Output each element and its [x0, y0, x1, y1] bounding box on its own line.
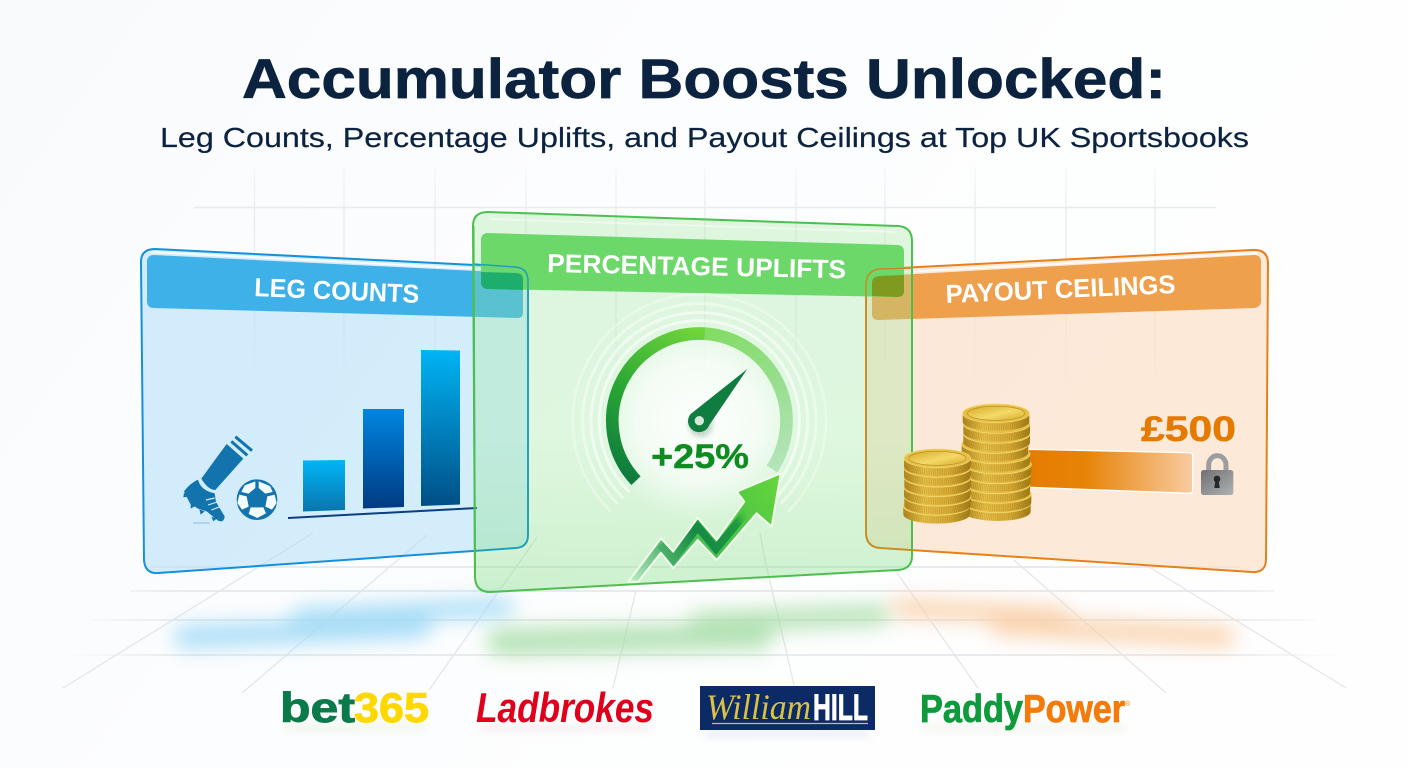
floor shadow: green panel: [500, 615, 880, 642]
panel: payout ceilings: [866, 250, 1268, 572]
logo shadows: [285, 725, 1125, 737]
title: Accumulator Boosts Unlocked:: [242, 47, 1166, 110]
logo: Ladbrokes: Ladbrokes: [476, 684, 654, 731]
logo: bet365: bet: [280, 684, 355, 731]
subtitle: Leg Counts, Percentage Uplifts, and Payout Ceilings at Top UK Sportsbooks: [160, 122, 1249, 153]
icon: football boot and ball: [183, 437, 277, 523]
logo: Paddy Power: Paddy: [920, 688, 1023, 731]
panel: leg counts: [141, 249, 528, 573]
heading: leg counts: LEG COUNTS: [254, 272, 420, 309]
icon: rising arrow: [628, 473, 781, 582]
logo: William Hill: [700, 686, 875, 730]
logo: William Hill: William: [706, 687, 811, 727]
bar chart: [288, 350, 477, 518]
icon: padlock: [1201, 456, 1233, 495]
heading bar: percentage uplifts: [481, 233, 904, 297]
panel: percentage uplifts: [473, 212, 912, 592]
floor shadow: orange panel: [900, 608, 1225, 637]
icon: coin stacks: [903, 404, 1031, 524]
floor shadow: blue panel: [185, 607, 505, 637]
heading: percentage uplifts: PERCENTAGE UPLIFTS: [547, 248, 846, 284]
logo: bet365: 365: [354, 684, 429, 731]
logo: Paddy Power: Power: [1023, 688, 1125, 731]
heading: payout ceilings: PAYOUT CEILINGS: [945, 269, 1176, 309]
payout ceiling bar: [1028, 449, 1193, 493]
payout value: £500: [1141, 410, 1236, 449]
panel overlap highlights: [473, 226, 912, 578]
heading bar: payout ceilings: [872, 255, 1261, 320]
payout graphic: [903, 404, 1233, 524]
gauge needle: [688, 369, 747, 437]
gauge: [573, 294, 826, 521]
background grid wall and floor: [60, 167, 1346, 693]
logo: bet365: [280, 684, 429, 731]
logo: Paddy Power: ®: [1125, 700, 1131, 708]
logo: Paddy Power: [920, 688, 1131, 731]
gauge value: +25%: [651, 438, 749, 476]
heading bar: leg counts: [147, 255, 523, 318]
logo: William Hill: HILL: [813, 687, 868, 728]
